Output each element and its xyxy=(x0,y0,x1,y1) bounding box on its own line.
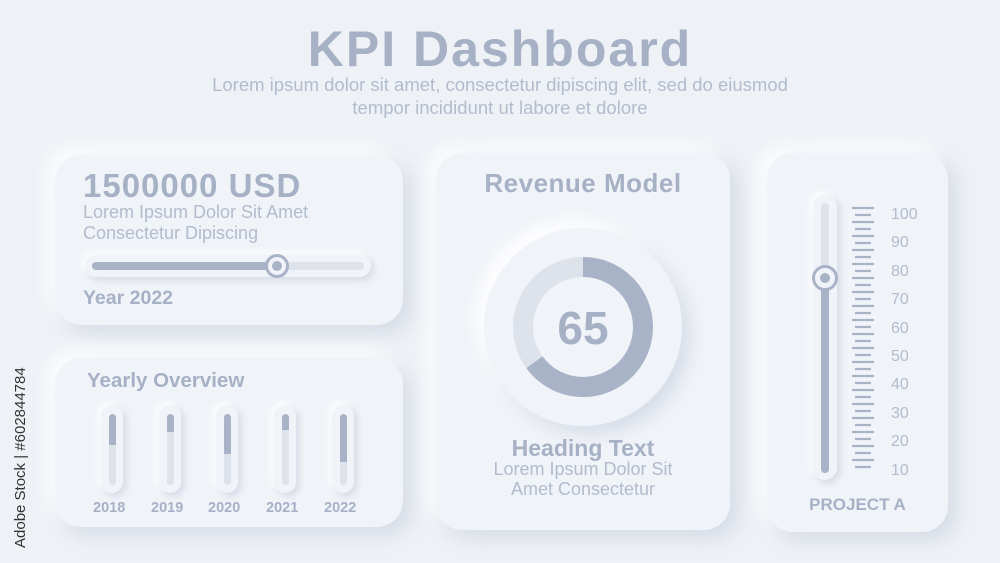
scale labels xyxy=(891,206,918,479)
description: Lorem Ipsum Dolor Sit xyxy=(493,459,673,479)
year label: Year 2022 xyxy=(83,287,173,309)
year labels: 2022 xyxy=(324,500,356,516)
scale labels: 100 xyxy=(891,206,918,223)
heading text: Heading Text xyxy=(512,435,654,461)
description xyxy=(83,202,308,243)
year labels: 2018 xyxy=(93,500,125,516)
vertical slider xyxy=(813,195,837,480)
scale ticks xyxy=(852,206,874,468)
subtitle xyxy=(212,74,788,118)
heading: Yearly Overview xyxy=(87,369,244,392)
description: Lorem Ipsum Dolor Sit Amet xyxy=(83,202,308,222)
watermark vertical text: Adobe Stock | #602844784 xyxy=(12,367,29,548)
year labels: 2020 xyxy=(208,500,240,516)
title: KPI Dashboard xyxy=(308,21,692,77)
scale labels: 30 xyxy=(891,405,909,422)
scale labels: 10 xyxy=(891,462,909,479)
year labels: 2021 xyxy=(266,500,298,516)
bar chart xyxy=(99,404,359,498)
donut chart: 65 xyxy=(557,302,609,354)
slider xyxy=(85,255,371,277)
amount heading: 1500000 USD xyxy=(83,167,301,204)
scale labels: 60 xyxy=(891,320,909,337)
scale labels: 90 xyxy=(891,234,909,251)
year labels: 2019 xyxy=(151,500,183,516)
panel: yearly overview xyxy=(55,358,403,527)
panel: revenue model xyxy=(436,153,730,530)
description xyxy=(493,459,673,499)
scale labels: 70 xyxy=(891,291,909,308)
panel: project A gauge xyxy=(767,153,948,532)
scale labels: 40 xyxy=(891,376,909,393)
project label: PROJECT A xyxy=(809,495,906,514)
description: Amet Consectetur xyxy=(511,479,655,499)
panel: revenue usd xyxy=(55,155,403,325)
scale labels: 20 xyxy=(891,433,909,450)
subtitle: Lorem ipsum dolor sit amet, consectetur dipiscing elit, sed do eiusmod xyxy=(212,74,788,95)
scale labels: 50 xyxy=(891,348,909,365)
scale labels: 80 xyxy=(891,263,909,280)
year labels xyxy=(93,500,356,516)
description: Consectetur Dipiscing xyxy=(83,223,258,243)
subtitle: tempor incididunt ut labore et dolore xyxy=(352,97,648,118)
heading: Revenue Model xyxy=(484,168,682,198)
donut chart xyxy=(484,228,682,426)
